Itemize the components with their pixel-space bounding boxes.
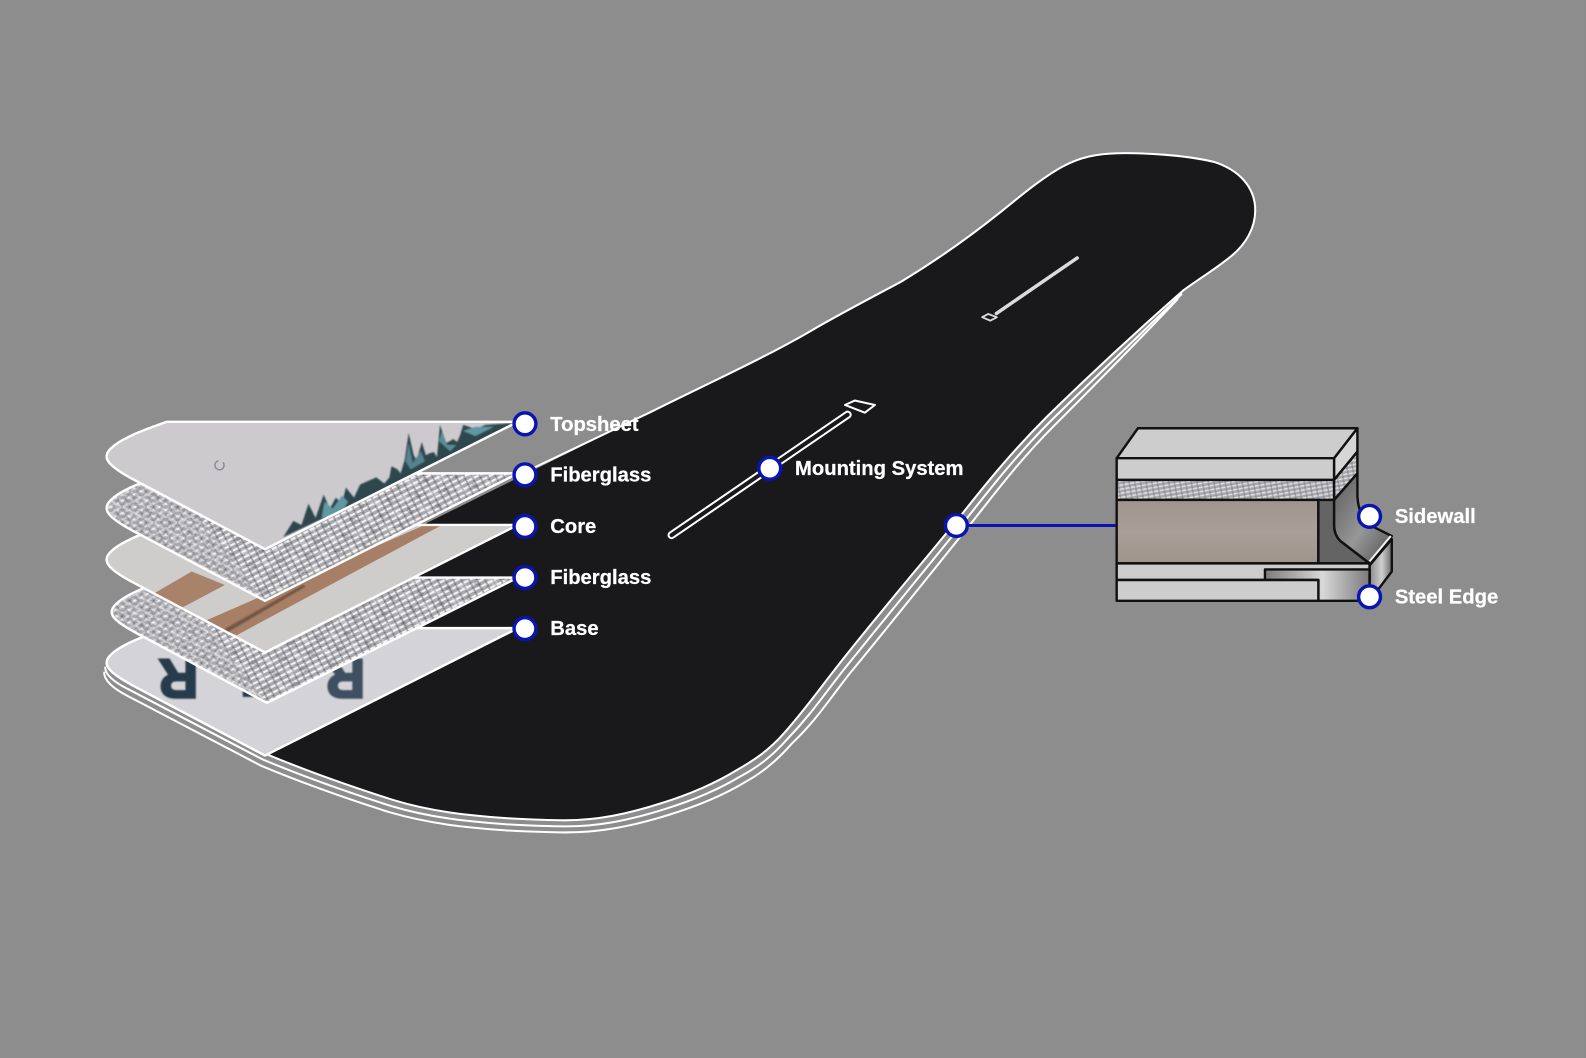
label: base: Base [550, 618, 599, 640]
steel edge [1265, 569, 1370, 601]
board deck [265, 153, 1255, 820]
layer: fiberglass lower [112, 578, 518, 703]
connector line to cross-section [956, 524, 1117, 527]
core wood stripes [152, 525, 442, 635]
dot: fiberglass lower [514, 567, 536, 588]
topsheet front [1117, 458, 1334, 480]
label: fiberglass upper: Fiberglass [550, 464, 651, 486]
dot: board edge [945, 515, 967, 536]
base graphic letters: R [326, 647, 365, 708]
dot: sidewall [1359, 505, 1380, 527]
mounting system rail: lower [672, 401, 875, 535]
dark sidewall face [1318, 500, 1370, 563]
lower layer front [1117, 563, 1370, 580]
topsheet small logo [215, 461, 224, 470]
layer: core [107, 525, 518, 652]
mounting system rail: upper [982, 258, 1077, 321]
layer: base [107, 628, 518, 756]
layer: fiberglass upper [107, 473, 518, 601]
dot: base [514, 618, 536, 640]
label: topsheet: Topsheet [550, 414, 639, 436]
dot: topsheet [514, 413, 536, 435]
metallic sidewall [1334, 473, 1392, 563]
board side edge lines [104, 290, 1183, 832]
top face [1117, 428, 1357, 458]
label: core: Core [550, 516, 596, 538]
label: mounting system: Mounting System [795, 458, 964, 480]
label: fiberglass lower: Fiberglass [550, 567, 651, 589]
board upper edge outline [518, 153, 1255, 475]
label: sidewall: Sidewall [1395, 506, 1476, 528]
base front [1117, 580, 1318, 601]
layer: topsheet [107, 422, 518, 549]
fiberglass front [1117, 480, 1334, 500]
label: steel edge: Steel Edge [1395, 586, 1498, 608]
fiberglass side [1334, 452, 1357, 500]
dot: core [514, 516, 536, 537]
base graphic letters: R [159, 647, 198, 708]
cross-section diagram [1117, 428, 1392, 601]
dot: steel edge [1359, 586, 1380, 608]
base graphic letters [157, 658, 364, 700]
steel edge side [1370, 539, 1392, 601]
wood core [1117, 500, 1318, 563]
dot: fiberglass upper [514, 464, 536, 486]
snowboard body [104, 153, 1255, 832]
topsheet side [1334, 428, 1357, 480]
topsheet tree line [283, 423, 518, 537]
dot: mounting system [759, 457, 781, 479]
